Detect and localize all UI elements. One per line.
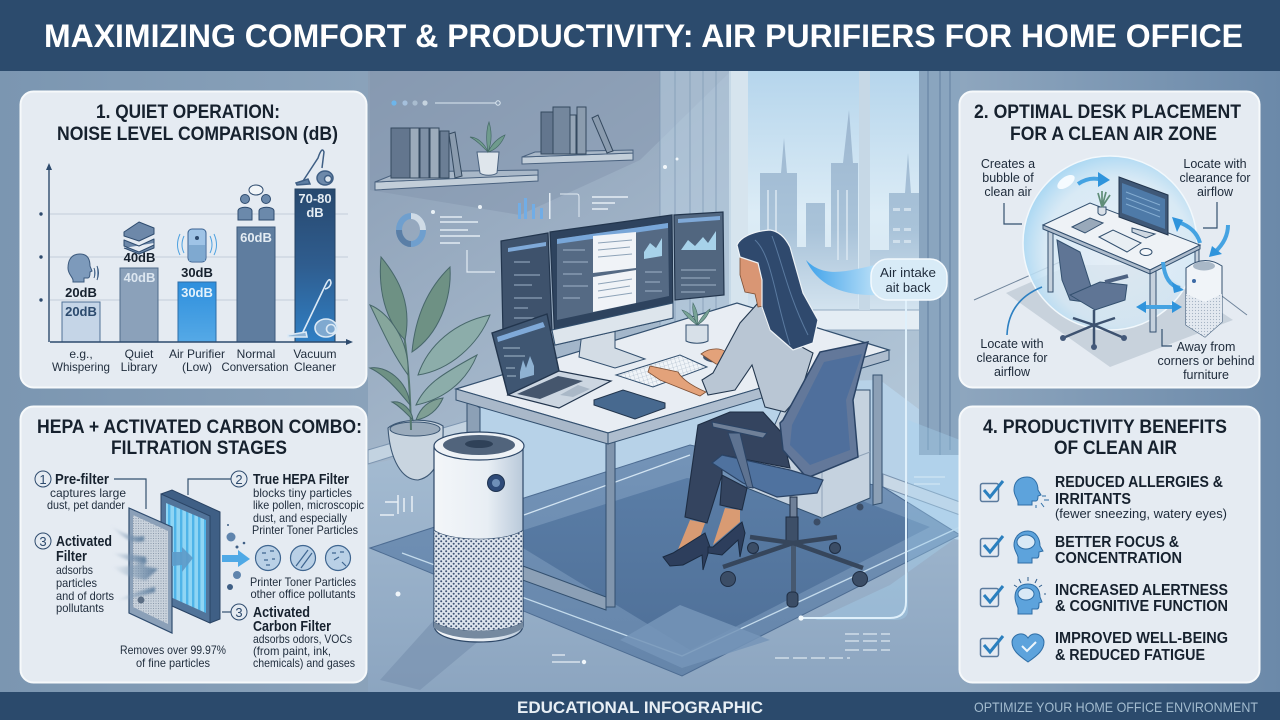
bar chart bbox=[39, 163, 353, 374]
diagram labels: airflow bbox=[1197, 185, 1234, 199]
arrow: filtered air out bbox=[222, 550, 250, 567]
diagram labels: Locate with bbox=[980, 337, 1044, 351]
diagram labels: bubble of bbox=[982, 171, 1034, 185]
bar chart: 20dB bbox=[65, 285, 97, 300]
callout: pre-filter: dust, pet dander bbox=[47, 498, 125, 512]
callout: activated filter: Activated bbox=[56, 533, 112, 550]
bar chart: 60dB bbox=[240, 230, 272, 245]
callout: pre-filter: 1 bbox=[39, 472, 47, 487]
benefit: reduced allergies: (fewer sneezing, watery eyes) bbox=[1055, 507, 1227, 521]
callout: activated filter: and of dorts bbox=[56, 589, 114, 603]
window bbox=[729, 70, 946, 330]
hair bbox=[737, 230, 818, 350]
benefit: better focus: BETTER FOCUS & bbox=[1055, 534, 1179, 551]
bar chart: (Low) bbox=[182, 360, 212, 374]
desk bbox=[456, 303, 889, 610]
callout: pre-filter bbox=[35, 471, 146, 512]
bar chart: Library bbox=[121, 360, 157, 374]
panel heading bbox=[983, 416, 1227, 459]
diagram labels bbox=[976, 157, 1255, 382]
icon: stacked books bbox=[124, 222, 154, 254]
footer bar: EDUCATIONAL INFOGRAPHIC bbox=[517, 698, 763, 717]
panel heading: 1. QUIET OPERATION: bbox=[96, 101, 280, 123]
bar chart: dB bbox=[306, 205, 324, 220]
rug bbox=[370, 445, 960, 676]
panel heading: 2. OPTIMAL DESK PLACEMENT bbox=[974, 101, 1241, 123]
panel heading: FOR A CLEAN AIR ZONE bbox=[1010, 123, 1217, 145]
bar chart: 40dB bbox=[124, 270, 155, 285]
callout: true HEPA filter: Printer Toner Particles bbox=[252, 523, 358, 537]
callout: activated carbon filter: (from paint, ink, bbox=[253, 644, 331, 658]
panel: productivity benefits bbox=[960, 406, 1260, 682]
callout: true HEPA filter bbox=[188, 471, 364, 537]
benefit: reduced allergies: REDUCED ALLERGIES & bbox=[1055, 474, 1223, 491]
diagram labels: Locate with bbox=[1183, 157, 1247, 171]
diagram labels: furniture bbox=[1183, 368, 1229, 382]
callout: activated carbon filter: chemicals) and gases bbox=[253, 656, 355, 670]
callout: activated carbon filter: Carbon Filter bbox=[253, 618, 331, 635]
bar chart: 70-80 bbox=[298, 191, 332, 206]
callout: activated filter bbox=[35, 533, 114, 615]
benefit: reduced allergies: IRRITANTS bbox=[1055, 491, 1131, 508]
panel heading: 4. PRODUCTIVITY BENEFITS bbox=[983, 416, 1227, 438]
icon: two people talking bbox=[238, 185, 274, 220]
left monitor bbox=[501, 233, 552, 335]
callout: activated filter: particles bbox=[56, 576, 97, 590]
panel heading: HEPA + ACTIVATED CARBON COMBO: bbox=[37, 416, 362, 438]
caption: efficiency: Removes over 99.97% bbox=[120, 643, 226, 657]
upper shelf with books bbox=[522, 107, 633, 164]
central illustration: home office scene bbox=[368, 70, 960, 692]
forearm and hands bbox=[648, 366, 706, 396]
caption: efficiency: of fine particles bbox=[136, 656, 210, 670]
shelf with books and plant bbox=[375, 122, 538, 190]
airflow arrows bbox=[1078, 179, 1228, 307]
panel: optimal desk placement bbox=[960, 92, 1260, 388]
air intake callout bbox=[806, 259, 947, 300]
panel heading bbox=[37, 416, 362, 459]
callout: activated carbon filter: Activated bbox=[253, 604, 310, 621]
bar chart: 30dB bbox=[181, 265, 213, 280]
particle icons bbox=[256, 546, 350, 570]
bar chart: Vacuum bbox=[293, 347, 337, 361]
diagram labels: clean air bbox=[984, 185, 1032, 199]
footer bar bbox=[0, 692, 1280, 720]
large potted plant bbox=[370, 257, 490, 480]
panel heading: NOISE LEVEL COMPARISON (dB) bbox=[57, 123, 338, 145]
icon: small air purifier bbox=[178, 229, 216, 262]
panel heading bbox=[974, 101, 1241, 145]
icon: vacuum cleaner in bar bbox=[288, 280, 337, 337]
callout: activated filter: 3 bbox=[39, 534, 47, 549]
wall bbox=[368, 70, 960, 470]
mini chair bbox=[1057, 240, 1092, 302]
trousers bbox=[685, 412, 790, 523]
callout: pre-filter: captures large bbox=[50, 486, 126, 500]
title bar bbox=[0, 0, 1280, 71]
bar chart: Quiet bbox=[125, 347, 154, 361]
diagram labels: Away from bbox=[1177, 340, 1235, 354]
benefit: improved well-being bbox=[980, 630, 1228, 664]
title bar: MAXIMIZING COMFORT & PRODUCTIVITY: AIR PURIFIERS FOR HOME OFFICE bbox=[44, 18, 1243, 54]
benefit: increased alertness: INCREASED ALERTNESS bbox=[1055, 582, 1228, 599]
air purifier bbox=[380, 432, 524, 690]
benefit: improved well-being: IMPROVED WELL-BEING bbox=[1055, 630, 1228, 647]
callout: true HEPA filter: dust, and especially bbox=[253, 511, 347, 525]
bar chart: 20dB bbox=[65, 304, 97, 319]
callout: true HEPA filter: 2 bbox=[235, 472, 243, 487]
feet and heels bbox=[675, 520, 705, 557]
callout: true HEPA filter: True HEPA Filter bbox=[253, 471, 349, 488]
face bbox=[740, 257, 770, 307]
laptop bbox=[492, 314, 611, 408]
callout: activated carbon filter bbox=[222, 604, 355, 670]
diagram labels: Creates a bbox=[981, 157, 1035, 171]
benefit: increased alertness: & COGNITIVE FUNCTION bbox=[1055, 598, 1228, 615]
mini purifier bbox=[1186, 260, 1222, 337]
panel heading bbox=[57, 101, 338, 145]
shirt bbox=[702, 303, 813, 412]
callout: activated filter: pollutants bbox=[56, 601, 104, 615]
bar chart: Cleaner bbox=[294, 360, 336, 374]
panel: HEPA and activated carbon filtration stages bbox=[20, 406, 366, 682]
air intake callout: Air intake bbox=[880, 266, 936, 280]
seat and base bbox=[712, 455, 823, 497]
chair back bbox=[780, 342, 868, 478]
diagram labels: airflow bbox=[994, 365, 1031, 379]
benefit: improved well-being: & REDUCED FATIGUE bbox=[1055, 647, 1205, 664]
right monitor bbox=[674, 212, 724, 300]
caption: printer toner particles bbox=[250, 575, 356, 601]
notebook bbox=[594, 390, 665, 419]
bar chart: 30dB bbox=[181, 285, 213, 300]
air intake callout: ait back bbox=[886, 281, 931, 295]
woman at desk in chair bbox=[648, 230, 868, 607]
bar chart: 40dB bbox=[124, 250, 155, 265]
caption: printer toner particles: Printer Toner Particles bbox=[250, 575, 356, 589]
diagram labels: clearance for bbox=[976, 351, 1048, 365]
icon: whispering head bbox=[68, 254, 98, 282]
benefit: better focus: CONCENTRATION bbox=[1055, 550, 1182, 567]
bar chart: Normal bbox=[237, 347, 275, 361]
bar chart: e.g., bbox=[69, 347, 93, 361]
filter stack diagram bbox=[110, 490, 245, 633]
callout: pre-filter: Pre-filter bbox=[55, 471, 109, 488]
bar chart: Conversation bbox=[222, 360, 288, 374]
bar chart: Air Purifier bbox=[169, 347, 225, 361]
callout: true HEPA filter: blocks tiny particles bbox=[253, 486, 352, 500]
callout: activated carbon filter: 3 bbox=[235, 605, 243, 620]
callout: activated carbon filter: adsorbs odors, VOCs bbox=[253, 632, 352, 646]
leader lines bbox=[1004, 202, 1217, 346]
floating data overlays bbox=[380, 100, 945, 664]
icon: vacuum cleaner on top bbox=[296, 150, 333, 185]
small desk plant bbox=[682, 303, 710, 343]
keyboard and mouse bbox=[616, 353, 720, 387]
desk placement diagram bbox=[974, 156, 1247, 367]
benefit: better focus bbox=[980, 531, 1182, 567]
mini monitor bbox=[1119, 177, 1168, 235]
floor bbox=[368, 430, 960, 692]
caption: printer toner particles: other office pollutants bbox=[250, 587, 356, 601]
diagram labels: corners or behind bbox=[1158, 354, 1255, 368]
curtains bbox=[660, 70, 960, 455]
bar chart: Whispering bbox=[52, 360, 110, 374]
benefit: reduced allergies bbox=[980, 474, 1227, 521]
callout: activated filter: Filter bbox=[56, 548, 87, 565]
panel heading: OF CLEAN AIR bbox=[1054, 437, 1177, 459]
callout: true HEPA filter: like pollen, microscopic bbox=[253, 498, 364, 512]
callout: activated filter: adsorbs bbox=[56, 563, 93, 577]
airflow connector line bbox=[798, 300, 960, 621]
main monitor bbox=[550, 215, 673, 368]
benefit: increased alertness bbox=[980, 577, 1228, 615]
diagram labels: clearance for bbox=[1180, 171, 1250, 185]
caption: efficiency bbox=[120, 643, 226, 670]
panel: quiet operation noise chart bbox=[20, 92, 366, 388]
panel heading: FILTRATION STAGES bbox=[111, 437, 287, 459]
